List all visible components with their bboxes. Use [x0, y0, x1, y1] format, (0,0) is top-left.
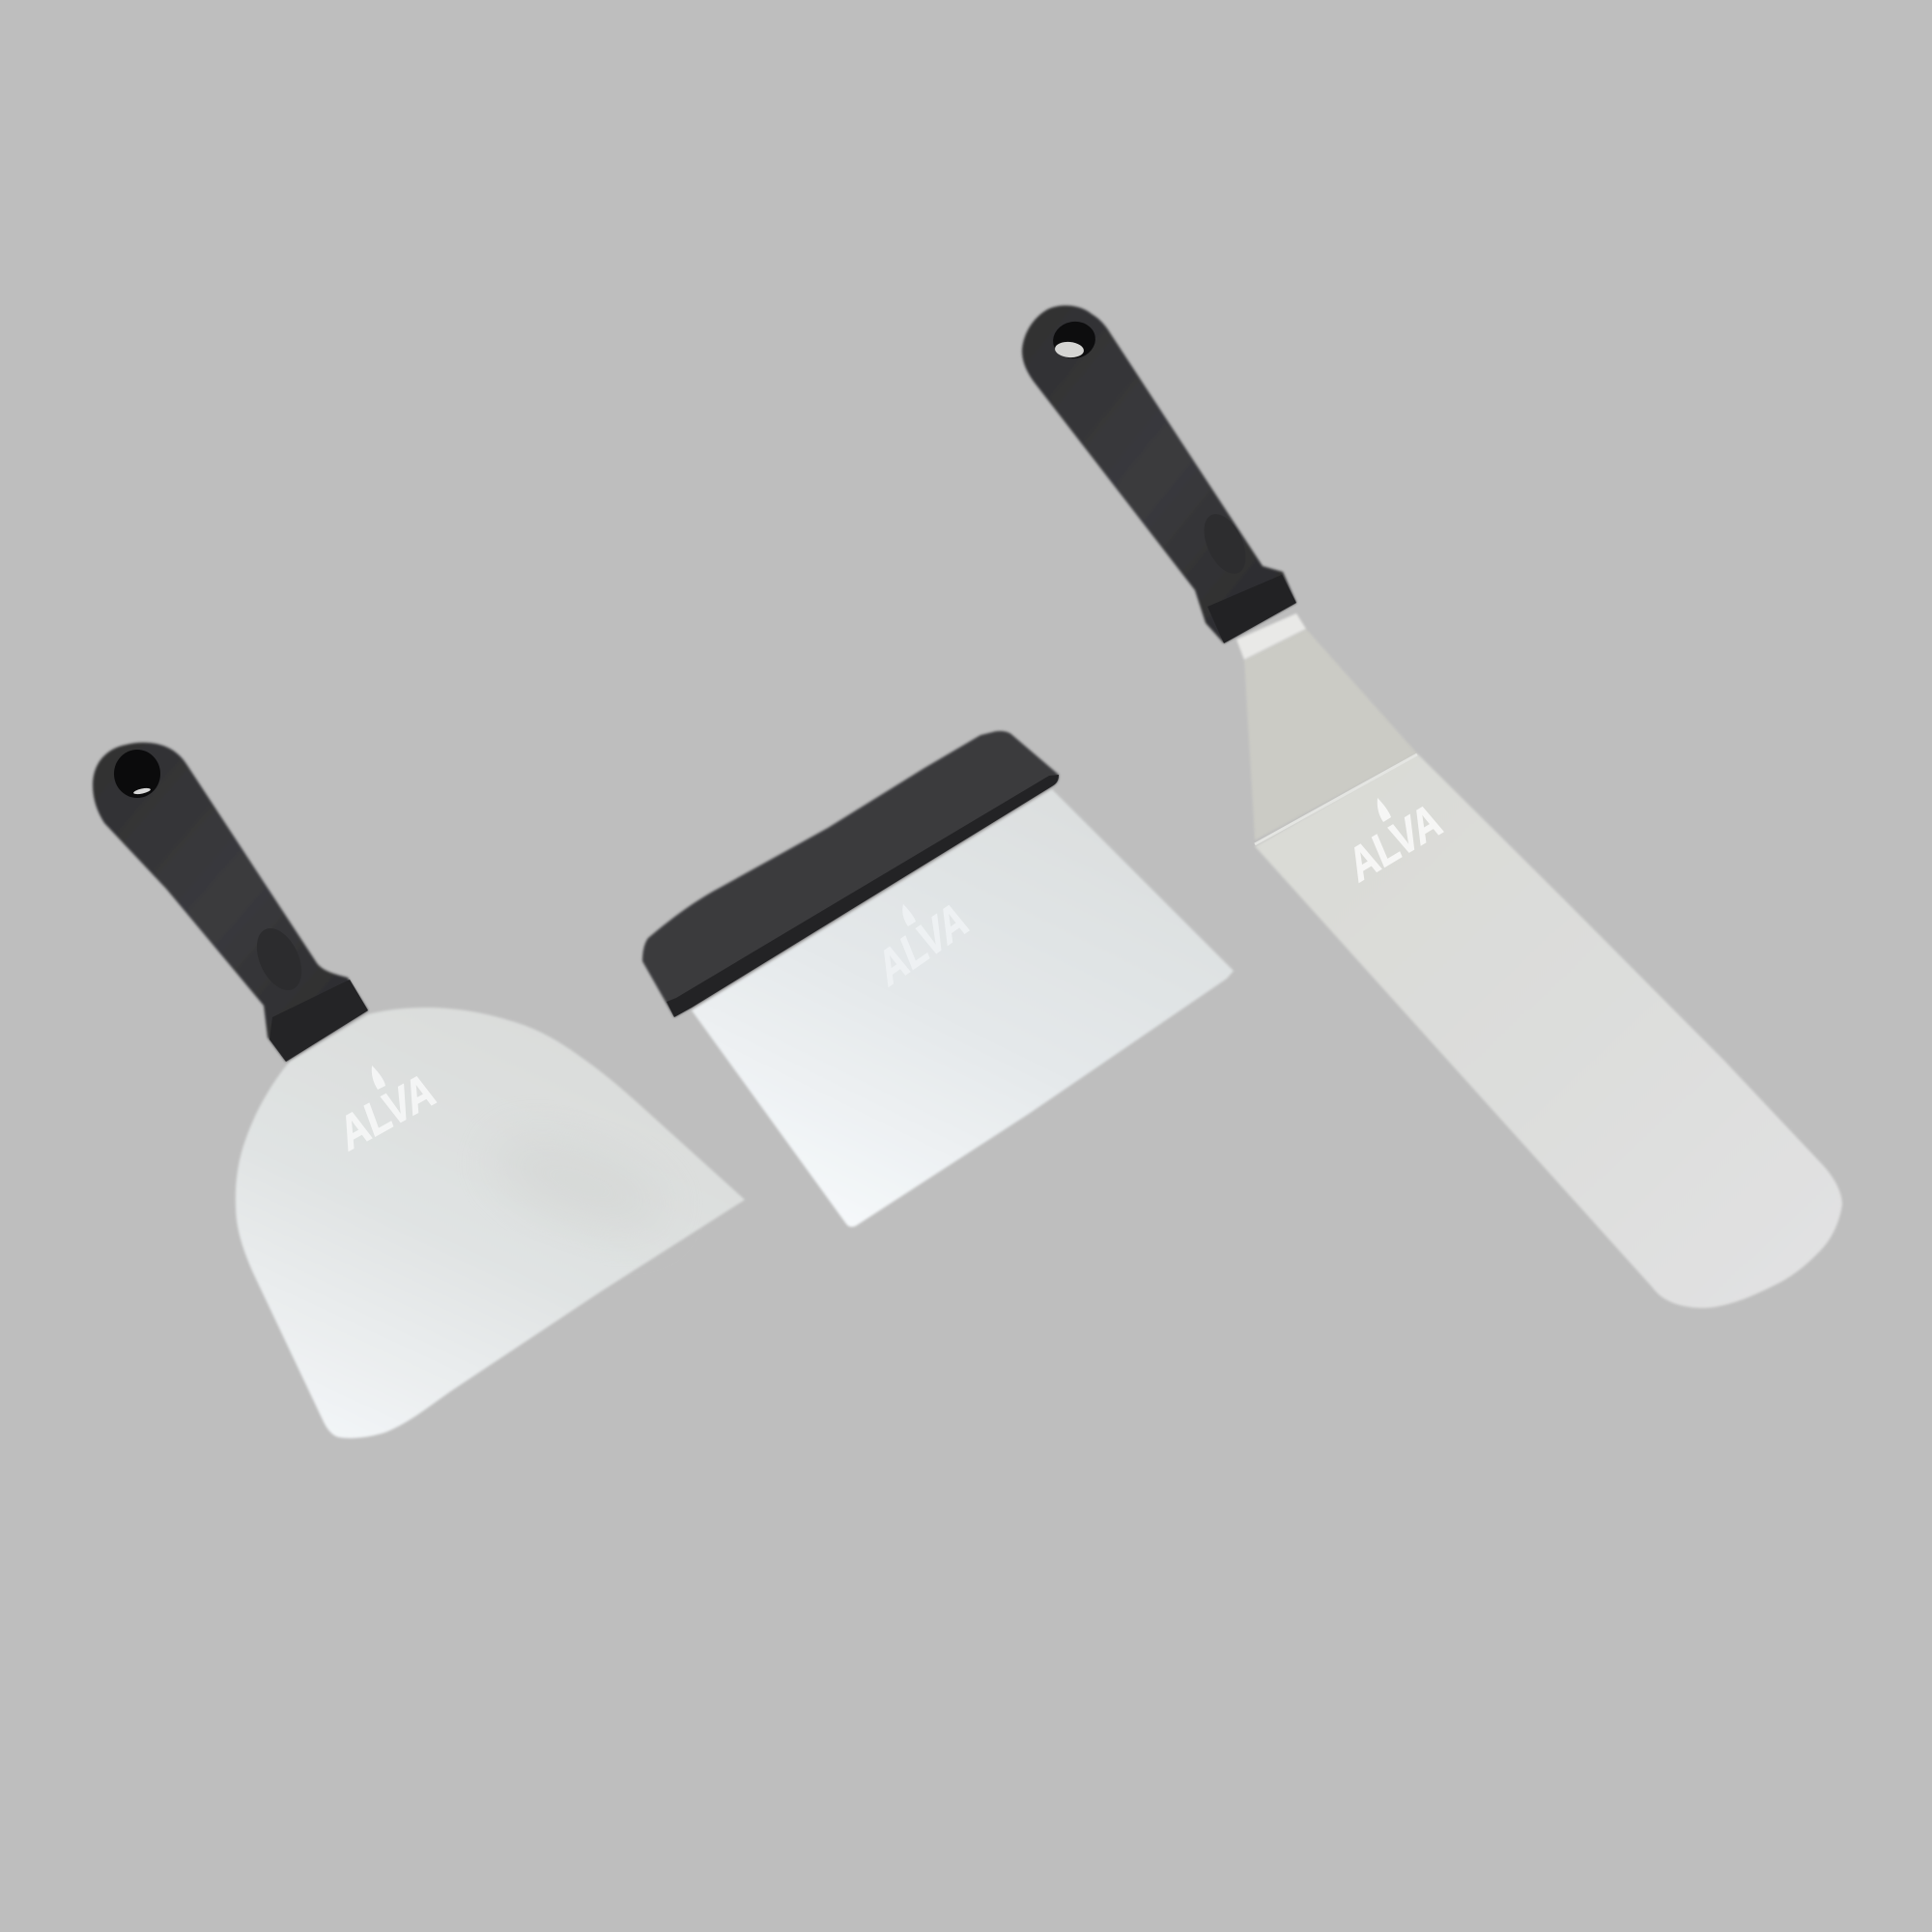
right logo wordmark: ALVA — [1342, 793, 1448, 893]
scraper handle lower band — [667, 775, 1059, 1017]
left spatula handle — [93, 743, 368, 1062]
right spatula handle — [1022, 305, 1296, 643]
left spatula — [93, 743, 745, 1438]
left logo wordmark: ALVA — [333, 1063, 440, 1161]
right blade bend highlight — [1255, 754, 1417, 844]
right hole opening — [1054, 341, 1085, 358]
middle scraper — [642, 731, 1234, 1227]
left hole highlight — [133, 787, 151, 795]
right blade neck — [1236, 613, 1306, 660]
left handle dimple — [248, 922, 310, 997]
scraper blade — [692, 789, 1234, 1227]
left blade shading — [480, 1116, 679, 1251]
left spatula blade — [236, 1008, 745, 1438]
right blade upper section — [1244, 629, 1417, 840]
left logo flame — [372, 1065, 385, 1090]
scraper handle — [642, 731, 1059, 1017]
right logo flame — [1378, 798, 1391, 822]
left logo — [333, 1063, 440, 1161]
right handle hole — [1050, 318, 1098, 362]
middle logo flame — [902, 904, 916, 926]
middle logo — [872, 891, 974, 997]
right spatula — [1022, 305, 1842, 1308]
right handle collar — [1208, 575, 1296, 643]
middle logo wordmark: ALVA — [872, 891, 974, 997]
right blade lower section — [1255, 753, 1842, 1308]
left handle hole — [114, 750, 160, 798]
right logo — [1342, 793, 1448, 893]
left handle collar — [270, 980, 368, 1062]
right handle dimple — [1196, 507, 1254, 581]
